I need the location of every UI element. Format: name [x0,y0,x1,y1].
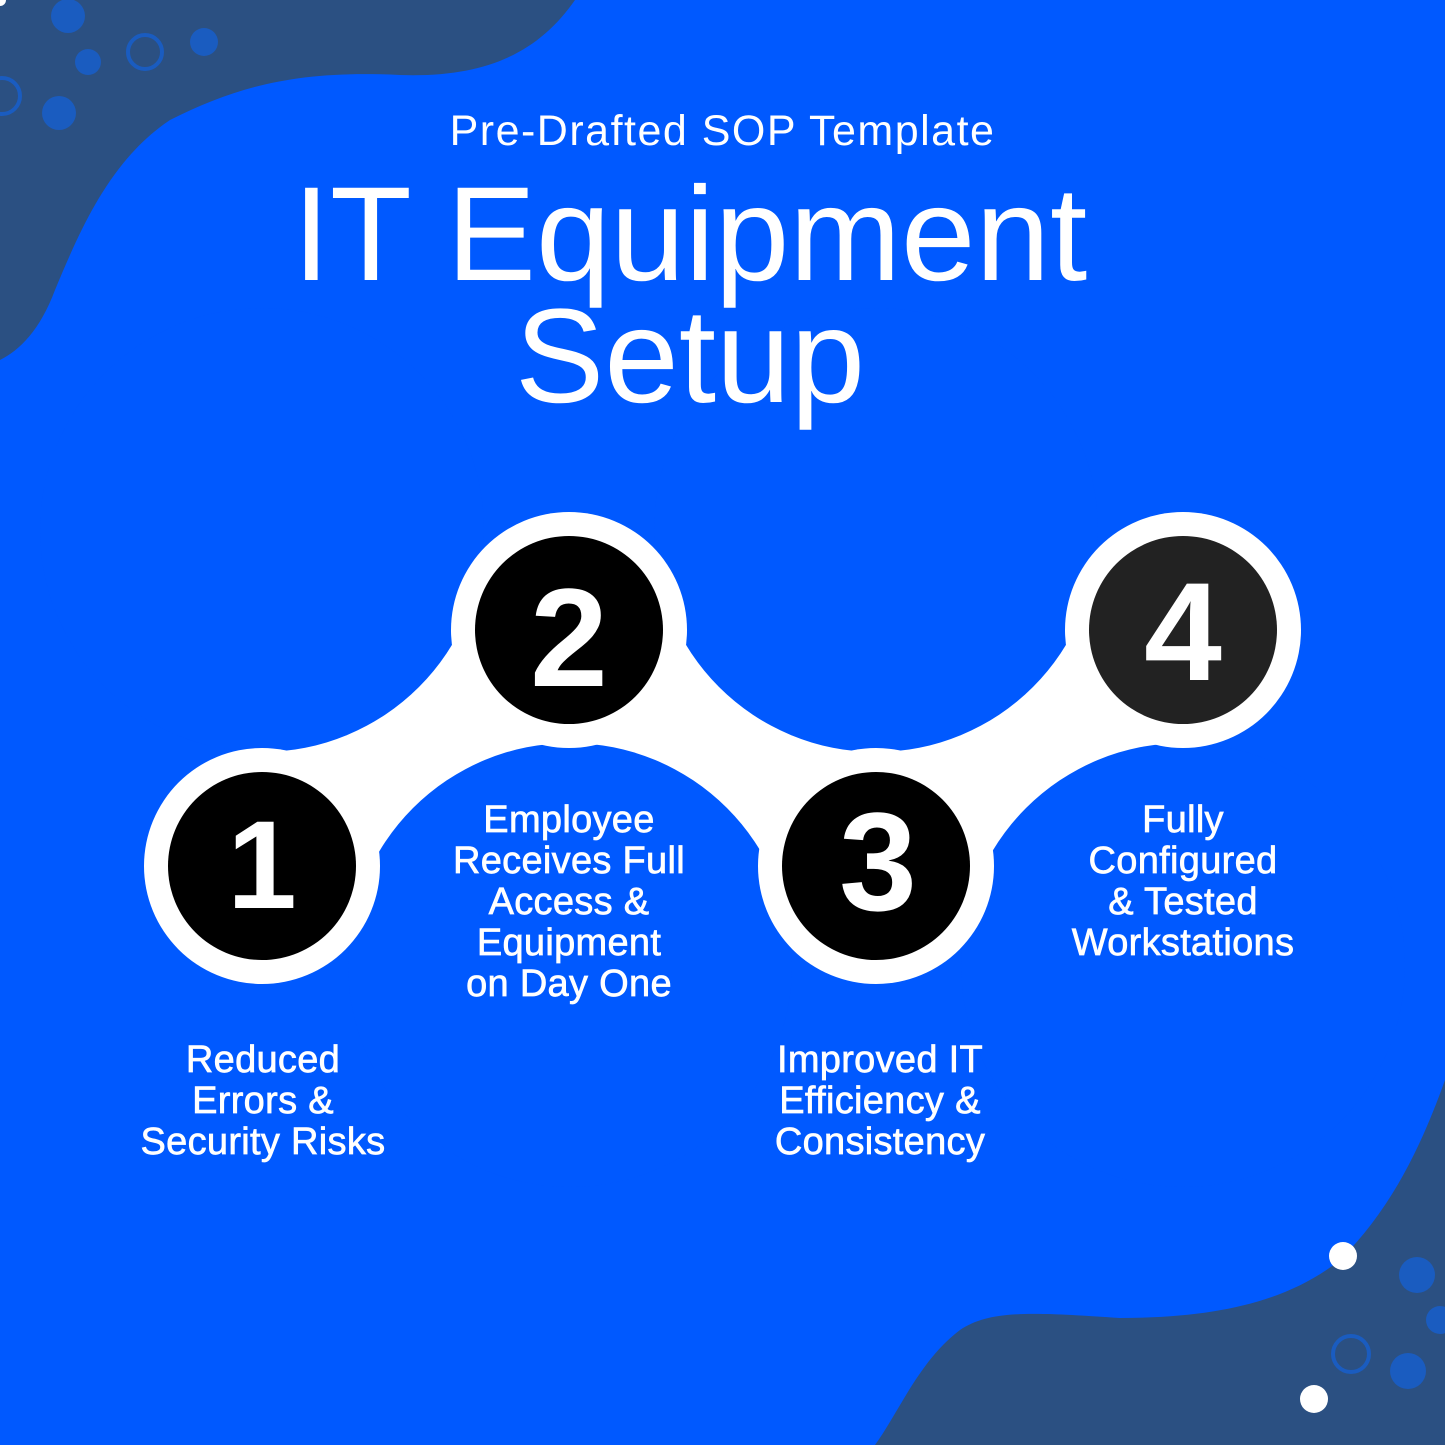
label 2: Receives Full [453,840,685,882]
label 2: Equipment [477,922,661,964]
step 3 circle [758,748,994,984]
title: Setup [515,282,865,431]
blob: top-left [0,0,575,360]
label 4: Workstations [1072,922,1294,964]
blob: bottom-right [875,1080,1445,1445]
step 4 circle: 4 [1144,553,1222,710]
label 1: Security Risks [141,1121,385,1163]
title [293,160,1087,431]
step 2 circle [451,512,687,748]
label 3: Efficiency & [779,1080,981,1122]
step 2 circle: 2 [530,559,608,716]
label 2 [453,799,685,1005]
label 1: Reduced [186,1039,340,1081]
label 4: & Tested [1108,881,1258,923]
label 3: Improved IT [777,1039,983,1081]
label 2: Access & [489,881,649,923]
subtitle: Pre-Drafted SOP Template [450,107,995,155]
label 4: Configured [1089,840,1277,882]
label 4: Fully [1142,799,1224,841]
title: IT Equipment [293,160,1087,309]
step 3 circle: 3 [839,783,917,940]
step 1 circle: 1 [227,796,297,935]
step 1 circle [144,748,380,984]
label 2: on Day One [466,963,672,1005]
label 2: Employee [483,799,655,841]
label 3: Consistency [775,1121,985,1163]
step 4 circle [1065,512,1301,748]
label 1: Errors & [192,1080,334,1122]
label 3 [775,1039,986,1163]
label 4 [1072,799,1294,964]
label 1 [141,1039,385,1163]
